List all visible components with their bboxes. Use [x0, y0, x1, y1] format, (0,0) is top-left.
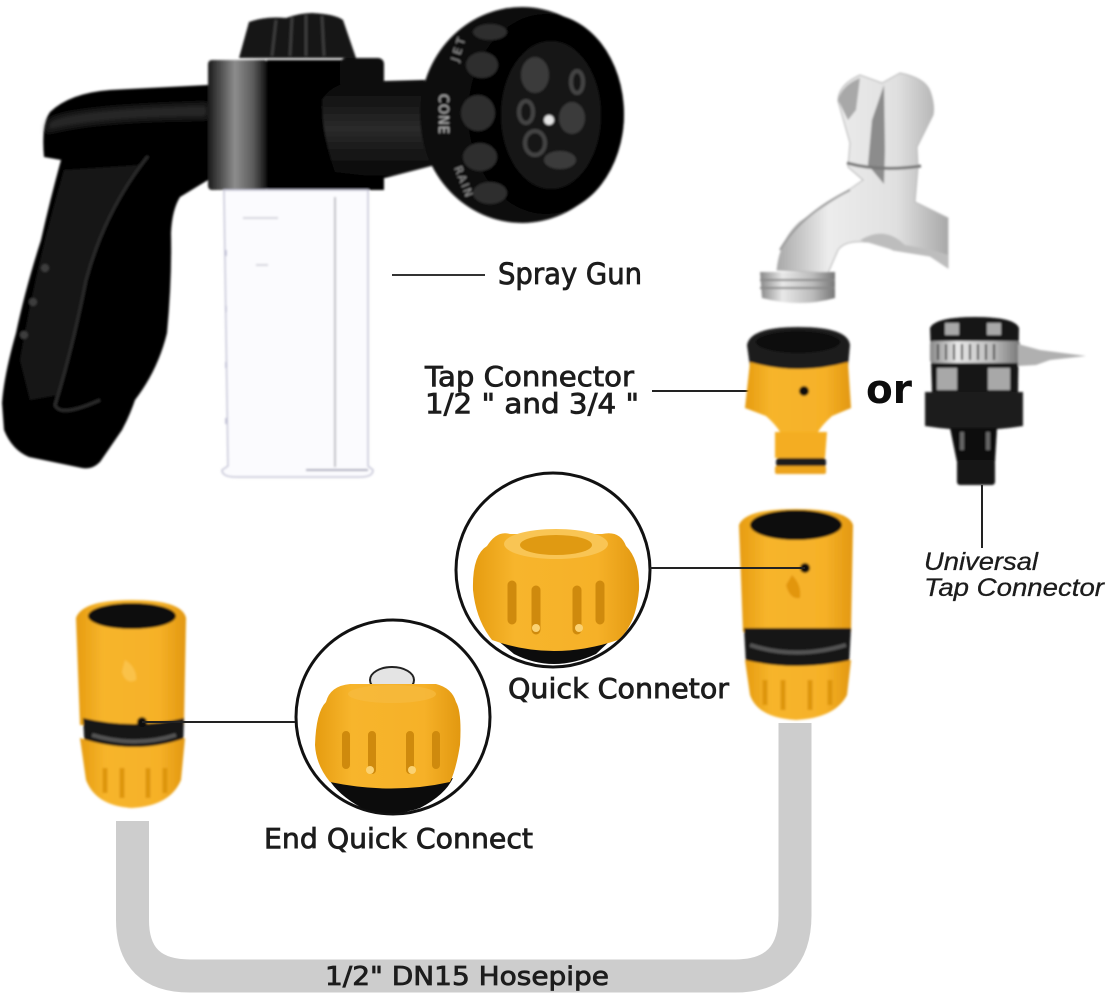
clamp: [930, 341, 1020, 363]
grip dots: [20, 264, 49, 339]
barrel highlight: [46, 104, 208, 132]
nozzle holes: [521, 57, 585, 169]
tap: [760, 73, 948, 303]
trigger edge: [55, 156, 148, 410]
quick connector right: [739, 509, 853, 720]
end quick connector left: [76, 600, 186, 808]
checker windows: [937, 323, 1010, 390]
spray gun: JET: [448, 36, 468, 64]
spray gun label: Spray Gun: [498, 257, 642, 291]
top knob: [239, 13, 356, 58]
front barrel: [322, 80, 435, 178]
grip panel: [20, 165, 140, 400]
hosepipe: 1/2" DN15 Hosepipe: [325, 962, 609, 992]
nut: [925, 392, 1023, 430]
tap thread: [760, 272, 835, 303]
end quick connect callout: End Quick Connect: [264, 822, 533, 855]
nozzle head: [420, 7, 624, 223]
hosepipe: [132, 723, 795, 992]
tap connector label: 1/2 " and 3/4 ": [425, 387, 639, 420]
soap bottle: [222, 190, 373, 477]
tap connector label: [424, 360, 804, 420]
spray gun: [2, 7, 624, 477]
quick connector callout: Quick Connetor: [508, 672, 729, 705]
tap connector label: Tap Connector: [424, 360, 635, 393]
end quick connect callout: [142, 620, 533, 855]
rear barrel and grip: [2, 85, 208, 468]
universal tap connector label: [924, 485, 1106, 602]
universal tap connector label: Tap Connector: [924, 574, 1106, 602]
tap connector: [745, 327, 851, 474]
universal tap connector label: Universal: [924, 548, 1040, 576]
quick connector callout: [456, 473, 805, 705]
or: or: [866, 367, 912, 413]
tap shading: [868, 85, 885, 184]
universal tap connector: [925, 317, 1086, 485]
body collar: [208, 60, 268, 190]
spray gun: RAIN: [451, 164, 475, 199]
bottle details: [334, 197, 336, 467]
nozzle labels: CONE: [435, 94, 450, 134]
finger recesses: [461, 24, 507, 204]
